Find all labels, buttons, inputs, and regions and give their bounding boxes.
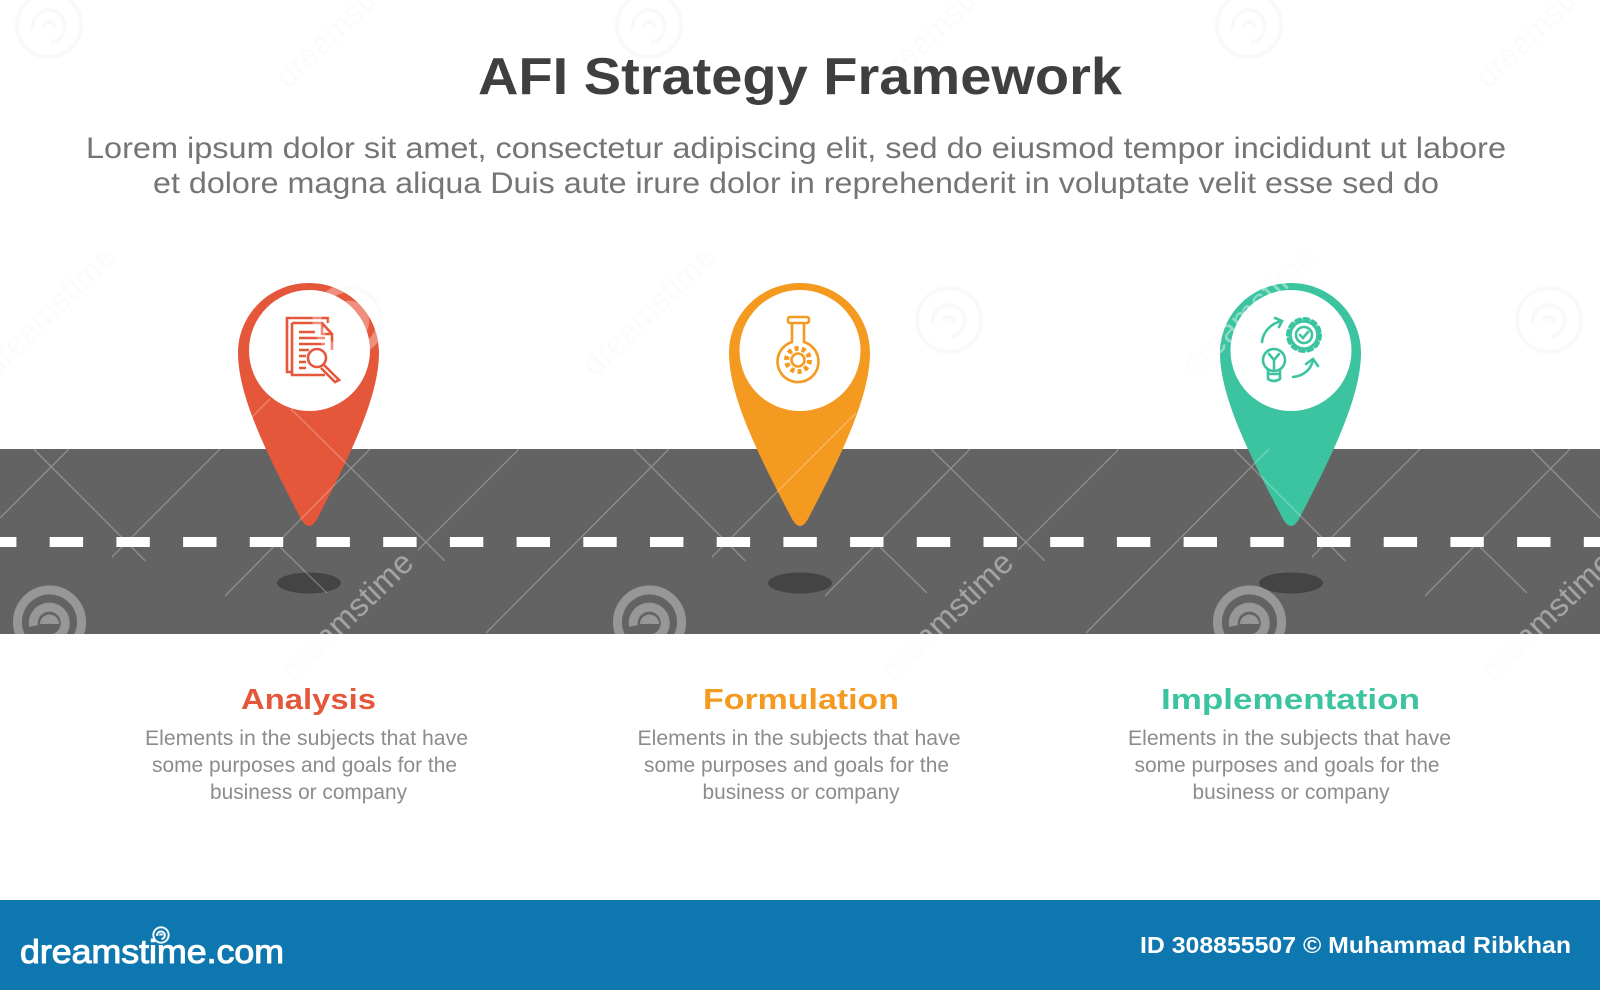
- faint watermark marks on white: dreamstime: [1175, 239, 1322, 383]
- watermark text: [273, 239, 1600, 688]
- label: analysis: business or company: [210, 780, 407, 804]
- icon: flask with gear: [777, 317, 818, 382]
- footer logo: dreamstime.com: [20, 933, 284, 970]
- watermark text: dreamstime: [273, 544, 420, 688]
- faint watermark marks on white: [0, 0, 1600, 688]
- faint watermark marks on white: dreamstime: [273, 544, 420, 688]
- watermark text: dreamstime: [873, 544, 1020, 688]
- footer bar: [0, 900, 1600, 990]
- label: formulation: business or company: [702, 780, 900, 804]
- pin: implementation: [1220, 283, 1361, 526]
- pin: analysis: [238, 283, 379, 526]
- icon: document with magnifier: [287, 318, 339, 382]
- label: analysis: Analysis: [241, 684, 376, 716]
- subtitle text: [86, 132, 1506, 200]
- label: implementation: Implementation: [1161, 684, 1420, 716]
- title: AFI Strategy Framework: [478, 48, 1122, 106]
- label: implementation: some purposes and goals for the: [1134, 753, 1440, 777]
- label: formulation: [638, 684, 960, 804]
- label: implementation: [1128, 684, 1451, 804]
- watermark overlay: [0, 288, 1600, 654]
- pin: formulation: [729, 283, 870, 526]
- label: implementation: Elements in the subjects that have: [1128, 726, 1451, 750]
- label: formulation: some purposes and goals for the: [644, 753, 949, 777]
- footer credit: ID 308855507 © Muhammad Ribkhan: [1140, 932, 1571, 958]
- subtitle text: et dolore magna aliqua Duis aute irure dolor in reprehenderit in voluptate velit esse sed do: [153, 167, 1439, 200]
- icon: bulb, gear and cycle arrows: [1262, 318, 1320, 381]
- road: [0, 449, 1600, 634]
- label: formulation: Elements in the subjects that have: [638, 726, 960, 750]
- label: analysis: some purposes and goals for the: [152, 753, 457, 777]
- label: implementation: business or company: [1192, 780, 1390, 804]
- label: analysis: [145, 684, 468, 804]
- subtitle text: Lorem ipsum dolor sit amet, consectetur adipiscing elit, sed do eiusmod tempor incididunt ut labore: [86, 132, 1506, 165]
- label: analysis: Elements in the subjects that have: [145, 726, 468, 750]
- label: formulation: Formulation: [703, 684, 899, 716]
- watermark text: dreamstime: [1175, 239, 1322, 383]
- faint watermark marks on white: dreamstime: [575, 239, 722, 383]
- pin shadows: [277, 572, 1323, 594]
- faint watermark marks on white: dreamstime: [873, 544, 1020, 688]
